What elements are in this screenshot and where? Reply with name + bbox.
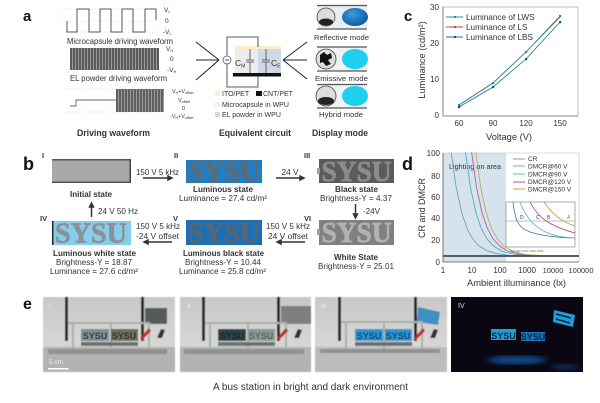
circuit legend — [215, 91, 294, 119]
state IV: luminous white: IV — [40, 214, 47, 223]
panel c: luminance line chart: 20 — [430, 39, 440, 48]
legend: DMCR@150 V — [528, 186, 572, 194]
axis labels: 100 — [493, 266, 507, 275]
state II: luminous: Luminous state — [193, 185, 254, 194]
axis labels — [427, 149, 594, 275]
chart: combined offset waveform: 0 — [182, 106, 185, 112]
chart: EL powder driving waveform: H — [170, 48, 173, 53]
chart: combined offset waveform: V — [178, 98, 182, 104]
inset chart: A — [567, 215, 571, 221]
legend: DMCR@60 V — [528, 164, 568, 170]
panel label e: e — [23, 296, 32, 313]
legend: Luminance of LBS — [466, 33, 533, 42]
legend — [513, 156, 572, 194]
lighting on area — [443, 153, 506, 262]
photo IV — [451, 297, 583, 372]
state II: luminous — [174, 151, 267, 203]
axis labels: 60 — [431, 193, 441, 202]
arrow: VI to V: 24 V offset — [268, 232, 309, 241]
axis labels: 10000 — [543, 266, 563, 275]
chart: combined offset waveform: -V — [170, 114, 176, 120]
state V: luminous black: V — [173, 214, 178, 223]
arrow: VI to V: 150 V 5 kHz — [266, 222, 310, 231]
chart: EL powder driving waveform: 0 — [170, 56, 174, 63]
state IV: luminous white: Brightness-Y = 18.87 — [56, 258, 133, 267]
state V: luminous black: Luminous black state — [183, 249, 265, 258]
chart: combined offset waveform: offset — [185, 91, 194, 95]
photo I: SYSU — [83, 331, 107, 341]
equivalent circuit: M — [241, 64, 245, 70]
arrow: V to IV: -24 V offset — [136, 232, 180, 241]
panel c: luminance line chart: 90 — [489, 119, 498, 128]
state I: initial: Initial state — [70, 190, 113, 199]
display mode: reflective: Reflective mode — [314, 33, 369, 42]
legend: DMCR@90 V — [528, 172, 568, 178]
photo IV: SYSU — [491, 331, 516, 341]
state III: black: Black state — [335, 185, 379, 194]
state V: luminous black: SYSU — [188, 218, 260, 249]
arrows into circuit, right — [283, 42, 307, 79]
state VI: white: SYSU — [322, 218, 392, 249]
state V: luminous black: Luminance = 25.8 cd/m² — [179, 267, 266, 276]
state I: initial — [42, 151, 131, 199]
state III: black — [304, 151, 394, 203]
axis labels: 80 — [431, 172, 441, 181]
inset chart — [506, 202, 575, 253]
data line: LWS — [458, 15, 561, 106]
inset chart: B — [547, 215, 551, 221]
chart: microcapsule driving waveform: 0 — [165, 18, 169, 25]
chart: combined offset waveform: +V — [178, 89, 185, 95]
chart: microcapsule driving waveform: -V — [163, 29, 170, 36]
display mode: reflective — [314, 6, 369, 42]
photo II: SYSU — [220, 331, 244, 341]
chart: combined offset waveform — [64, 89, 194, 120]
state III: black: III — [304, 151, 310, 160]
state IV: luminous white: Luminous white state — [53, 249, 137, 258]
arrow: IV to I — [90, 203, 138, 217]
equivalent circuit — [223, 37, 281, 87]
chart: EL powder driving waveform: EL powder driving waveform — [70, 74, 167, 83]
panel label c: c — [404, 8, 412, 25]
arrow: V to IV — [136, 222, 180, 244]
chart: EL powder driving waveform: V — [166, 46, 170, 53]
panel c: luminance line chart: Voltage (V) — [486, 132, 532, 142]
panel label a: a — [23, 8, 32, 25]
panel b: state transition diagram — [23, 151, 395, 276]
chart: microcapsule driving waveform: V — [164, 7, 168, 14]
panel c: luminance line chart: 10 — [430, 75, 440, 84]
equivalent circuit: C — [271, 58, 277, 68]
chart: combined offset waveform: H — [176, 116, 178, 120]
chart: microcapsule driving waveform — [62, 7, 173, 46]
heading: equivalent circuit: Equivalent circuit — [219, 128, 291, 138]
display mode: hybrid: Hybrid mode — [319, 110, 363, 119]
arrow: IV to I: 24 V 50 Hz — [98, 207, 138, 216]
axis labels: 20 — [431, 236, 441, 245]
photo IV: SYSU — [521, 332, 545, 342]
state VI: white: Brightness-Y = 25.01 — [318, 262, 395, 271]
circuit legend: ITO/PET — [222, 91, 250, 98]
photo III: III — [321, 303, 327, 310]
display mode: hybrid — [316, 84, 368, 119]
heading: driving waveform: Driving waveform — [77, 128, 150, 138]
photo III: SYSU — [357, 331, 381, 341]
legend — [446, 13, 535, 42]
data line: LBS — [458, 21, 561, 108]
display mode: emissive: Emissive mode — [315, 74, 368, 83]
panel c: luminance line chart — [404, 3, 578, 142]
axis labels: 40 — [431, 214, 441, 223]
chart: combined offset waveform: H — [176, 91, 179, 95]
panel c: luminance line chart: 60 — [455, 119, 464, 128]
state III: black: SYSU — [322, 157, 392, 188]
panel label d: d — [402, 154, 413, 174]
arrow: III to VI: -24V — [363, 207, 381, 216]
arrows into circuit, left — [196, 42, 219, 80]
panel d: CR and DMCR chart: Lighting on area — [449, 162, 502, 171]
axis labels: 100000 — [568, 266, 594, 275]
photo II: II — [187, 303, 191, 310]
axis labels: 10 — [468, 266, 477, 275]
state III: black: Brightness-Y = 4.37 — [320, 194, 393, 203]
display mode: emissive — [315, 47, 368, 83]
photo II: SYSU — [249, 331, 273, 341]
panel d: CR and DMCR chart — [402, 149, 594, 288]
panel d: CR and DMCR chart: Ambient illuminance (lx) — [467, 278, 566, 288]
photo I: I — [49, 303, 51, 310]
axis labels: 1 — [441, 266, 446, 275]
inset chart: C — [536, 215, 540, 221]
CR line — [443, 255, 579, 257]
arrow: V to IV: 150 V 5 kHz — [136, 222, 180, 231]
arrow: VI to V — [266, 222, 310, 244]
chart: EL powder driving waveform — [70, 46, 176, 83]
panel c: luminance line chart: 150 — [553, 119, 567, 128]
panel c: luminance line chart: 120 — [519, 119, 533, 128]
state V: luminous black — [173, 214, 266, 276]
state VI: white: White State — [334, 253, 379, 262]
chart: EL powder driving waveform: H — [174, 69, 176, 74]
photo II — [180, 297, 311, 372]
chart: combined offset waveform: V — [172, 89, 176, 95]
state IV: luminous white: Luminance = 27.6 cd/m² — [50, 267, 138, 276]
circuit legend: EL powder in WPU — [222, 112, 281, 119]
state V: luminous black: Brightness-Y = 10.44 — [185, 258, 262, 267]
circuit legend: Microcapsule in WPU — [222, 102, 289, 109]
heading: display mode: Display mode — [312, 128, 368, 138]
DMCR curves — [451, 152, 540, 256]
state II: luminous: II — [174, 151, 178, 160]
panel a: driving waveform, circuit and display modes — [23, 6, 369, 138]
chart: microcapsule driving waveform: L — [168, 9, 171, 14]
legend: Luminance of LS — [466, 23, 528, 32]
arrow: III to VI — [354, 204, 381, 218]
state II: luminous: Luminance = 27.4 cd/m² — [179, 194, 267, 203]
photo I — [43, 297, 175, 372]
photo III — [315, 297, 447, 372]
photo III: SYSU — [386, 331, 410, 341]
equivalent circuit: E — [277, 64, 281, 70]
arrow: II to III — [276, 168, 304, 180]
photo I: SYSU — [112, 331, 136, 341]
legend: DMCR@120 V — [528, 179, 572, 186]
caption: A bus station in bright and dark environment — [213, 382, 408, 393]
chart: combined offset waveform: offset — [185, 116, 193, 120]
data line: LS — [459, 17, 560, 105]
axis labels: 100 — [427, 149, 441, 158]
panel d: CR and DMCR chart: CR and DMCR — [417, 177, 427, 238]
state IV: luminous white — [40, 214, 138, 276]
panel c: luminance line chart: 0 — [435, 111, 440, 120]
state VI: white — [304, 214, 395, 271]
axis labels: 0 — [436, 258, 441, 267]
state II: luminous: SYSU — [188, 157, 260, 188]
chart: combined offset waveform: +V — [178, 114, 185, 120]
axis labels: 1000 — [518, 266, 536, 275]
panel e: bus station photos — [23, 296, 583, 393]
photo IV: IV — [458, 303, 465, 310]
circuit legend: CNT/PET — [263, 91, 294, 98]
legend: Luminance of LWS — [466, 13, 535, 22]
chart: EL powder driving waveform: -V — [167, 67, 174, 74]
panel c: luminance line chart: 30 — [430, 3, 440, 12]
legend: CR — [528, 156, 538, 163]
panel c: luminance line chart: Luminance (cd/m²) — [417, 21, 427, 99]
arrow: II to III: 24 V — [282, 168, 299, 177]
state I: initial: I — [42, 151, 44, 160]
chart: microcapsule driving waveform: L — [170, 31, 172, 36]
equivalent circuit: C — [235, 58, 241, 68]
state VI: white: VI — [304, 214, 311, 223]
inset chart: 800 900 1000 1200 1500 — [510, 249, 544, 253]
chart: combined offset waveform: offset — [182, 100, 190, 104]
inset chart: D — [520, 215, 524, 221]
panel label b: b — [23, 154, 34, 174]
photo I: 5 cm — [49, 359, 63, 366]
arrow: I to II: 150 V 5 kHz — [136, 168, 179, 177]
state IV: luminous white: SYSU — [55, 218, 127, 250]
chart: microcapsule driving waveform: Microcapsule driving waveform — [67, 37, 173, 46]
